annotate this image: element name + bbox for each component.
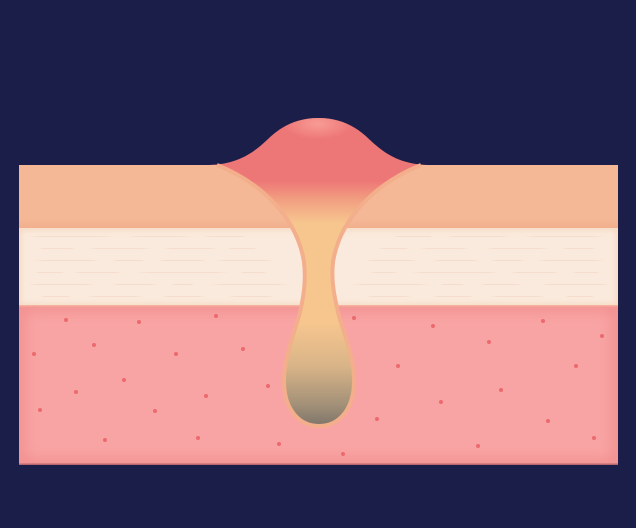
layer: dermis — [19, 228, 618, 306]
scattered dots in subcutis — [32, 314, 604, 456]
pimple: bump and follicle — [205, 111, 432, 426]
panel: skin layers — [19, 165, 618, 465]
follicle fill with gradient — [205, 118, 432, 426]
highlight on top of bump — [290, 118, 347, 136]
layer: epidermis — [19, 165, 618, 228]
layer: subcutis — [19, 305, 618, 465]
fine lines: right dermis — [350, 236, 610, 297]
follicle outline — [217, 165, 421, 426]
infographic: skin cross-section — [19, 118, 618, 465]
fine lines: left dermis — [27, 236, 290, 297]
